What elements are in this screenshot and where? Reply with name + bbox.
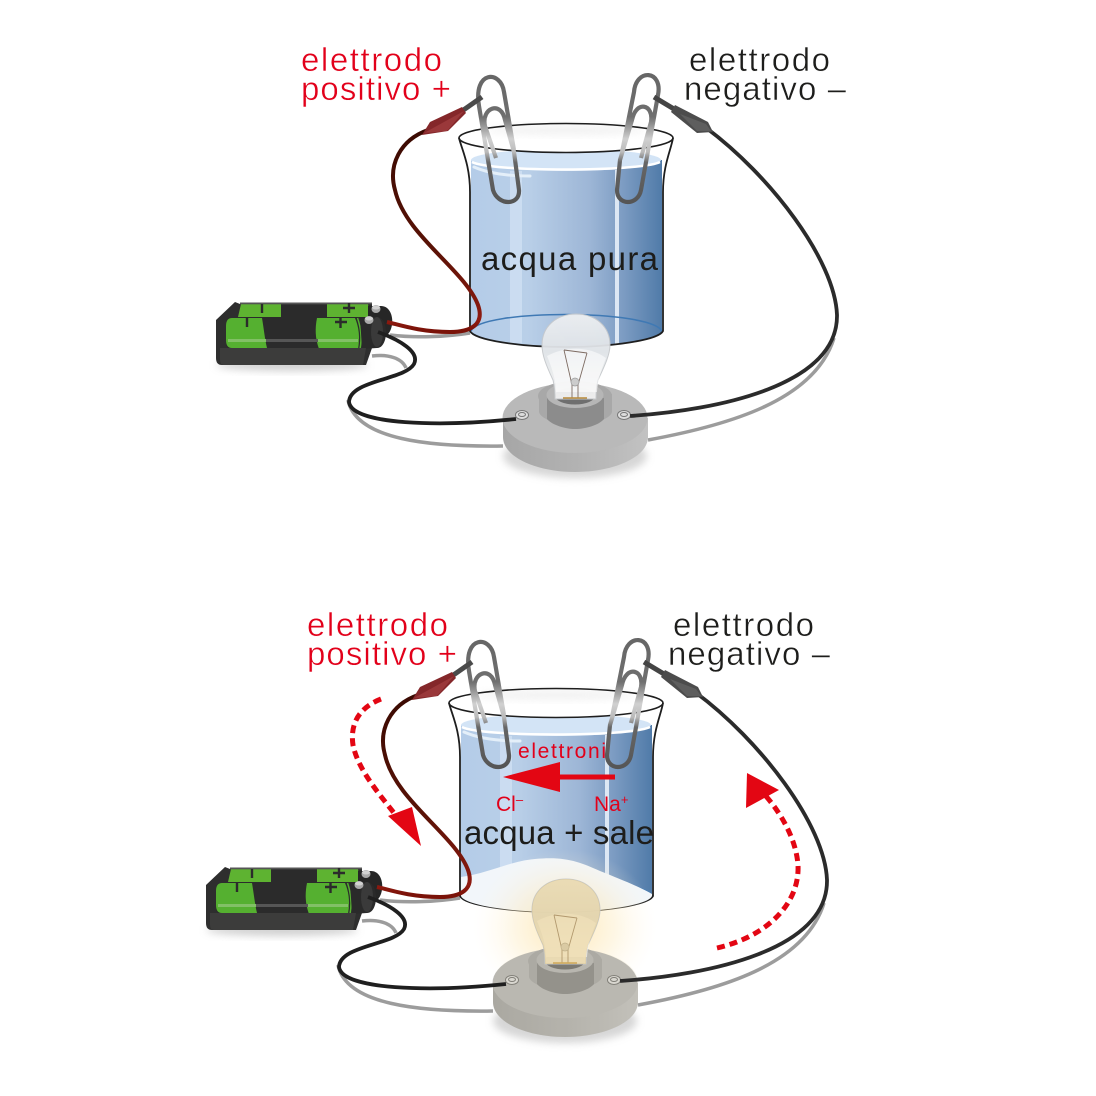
label: elettrodo negativo top: negativo – — [684, 70, 847, 107]
black wire: battery to lamp — [349, 332, 516, 423]
dashed arrow: left current direction — [352, 699, 421, 846]
label: elettroni: elettroni — [518, 740, 606, 763]
paperclip: negative electrode — [607, 640, 649, 767]
black wire: electrode to lamp — [620, 692, 827, 981]
label: acqua pura: acqua pura — [481, 240, 659, 277]
black crocodile clip — [644, 662, 703, 698]
black wire: electrode to lamp — [630, 127, 837, 416]
black wire: battery to lamp — [339, 897, 506, 988]
battery pack — [206, 867, 382, 936]
label: elettrodo negativo bottom: elettrodo — [673, 606, 814, 643]
label: Cl- ion: Cl — [496, 793, 516, 816]
beaker with salt water — [449, 688, 663, 912]
red crocodile clip — [422, 97, 482, 135]
arrow: electron flow inside water — [503, 762, 615, 792]
paperclip: positive electrode — [478, 77, 519, 202]
warm tint on lamp base — [493, 948, 638, 1037]
lamp glow — [473, 849, 657, 1005]
battery pack — [216, 302, 392, 371]
diagram: acqua e sale circuit — [206, 640, 827, 1043]
red wire — [387, 130, 480, 332]
label: acqua + sale: acqua + sale — [464, 814, 654, 851]
red crocodile clip — [412, 662, 472, 700]
label: elettrodo positivo top: positivo + — [301, 70, 451, 107]
label: Na+ ion: + — [621, 792, 628, 807]
diagram: acqua pura circuit — [216, 75, 837, 478]
label: Cl- ion: – — [516, 792, 524, 807]
label: elettrodo positivo top: elettrodo — [301, 41, 442, 78]
light bulb on — [532, 879, 600, 964]
dashed arrow: right current direction — [717, 773, 798, 948]
beaker with pure water — [459, 124, 673, 347]
wire shadows — [348, 333, 834, 446]
label: elettrodo negativo top: elettrodo — [689, 41, 830, 78]
paperclip: positive electrode — [468, 642, 509, 767]
label: elettrodo positivo bottom: positivo + — [307, 635, 457, 672]
black crocodile clip — [654, 97, 713, 133]
paperclip: negative electrode — [617, 75, 659, 202]
label: elettrodo positivo bottom: elettrodo — [307, 606, 448, 643]
light bulb off — [542, 314, 610, 399]
lamp base — [492, 946, 638, 1043]
wire shadows — [338, 898, 824, 1011]
red wire — [377, 695, 470, 897]
lamp base — [502, 381, 648, 478]
label: elettrodo negativo bottom: negativo – — [668, 635, 831, 672]
salt pile — [461, 858, 652, 912]
label: Na+ ion: Na — [594, 793, 621, 816]
